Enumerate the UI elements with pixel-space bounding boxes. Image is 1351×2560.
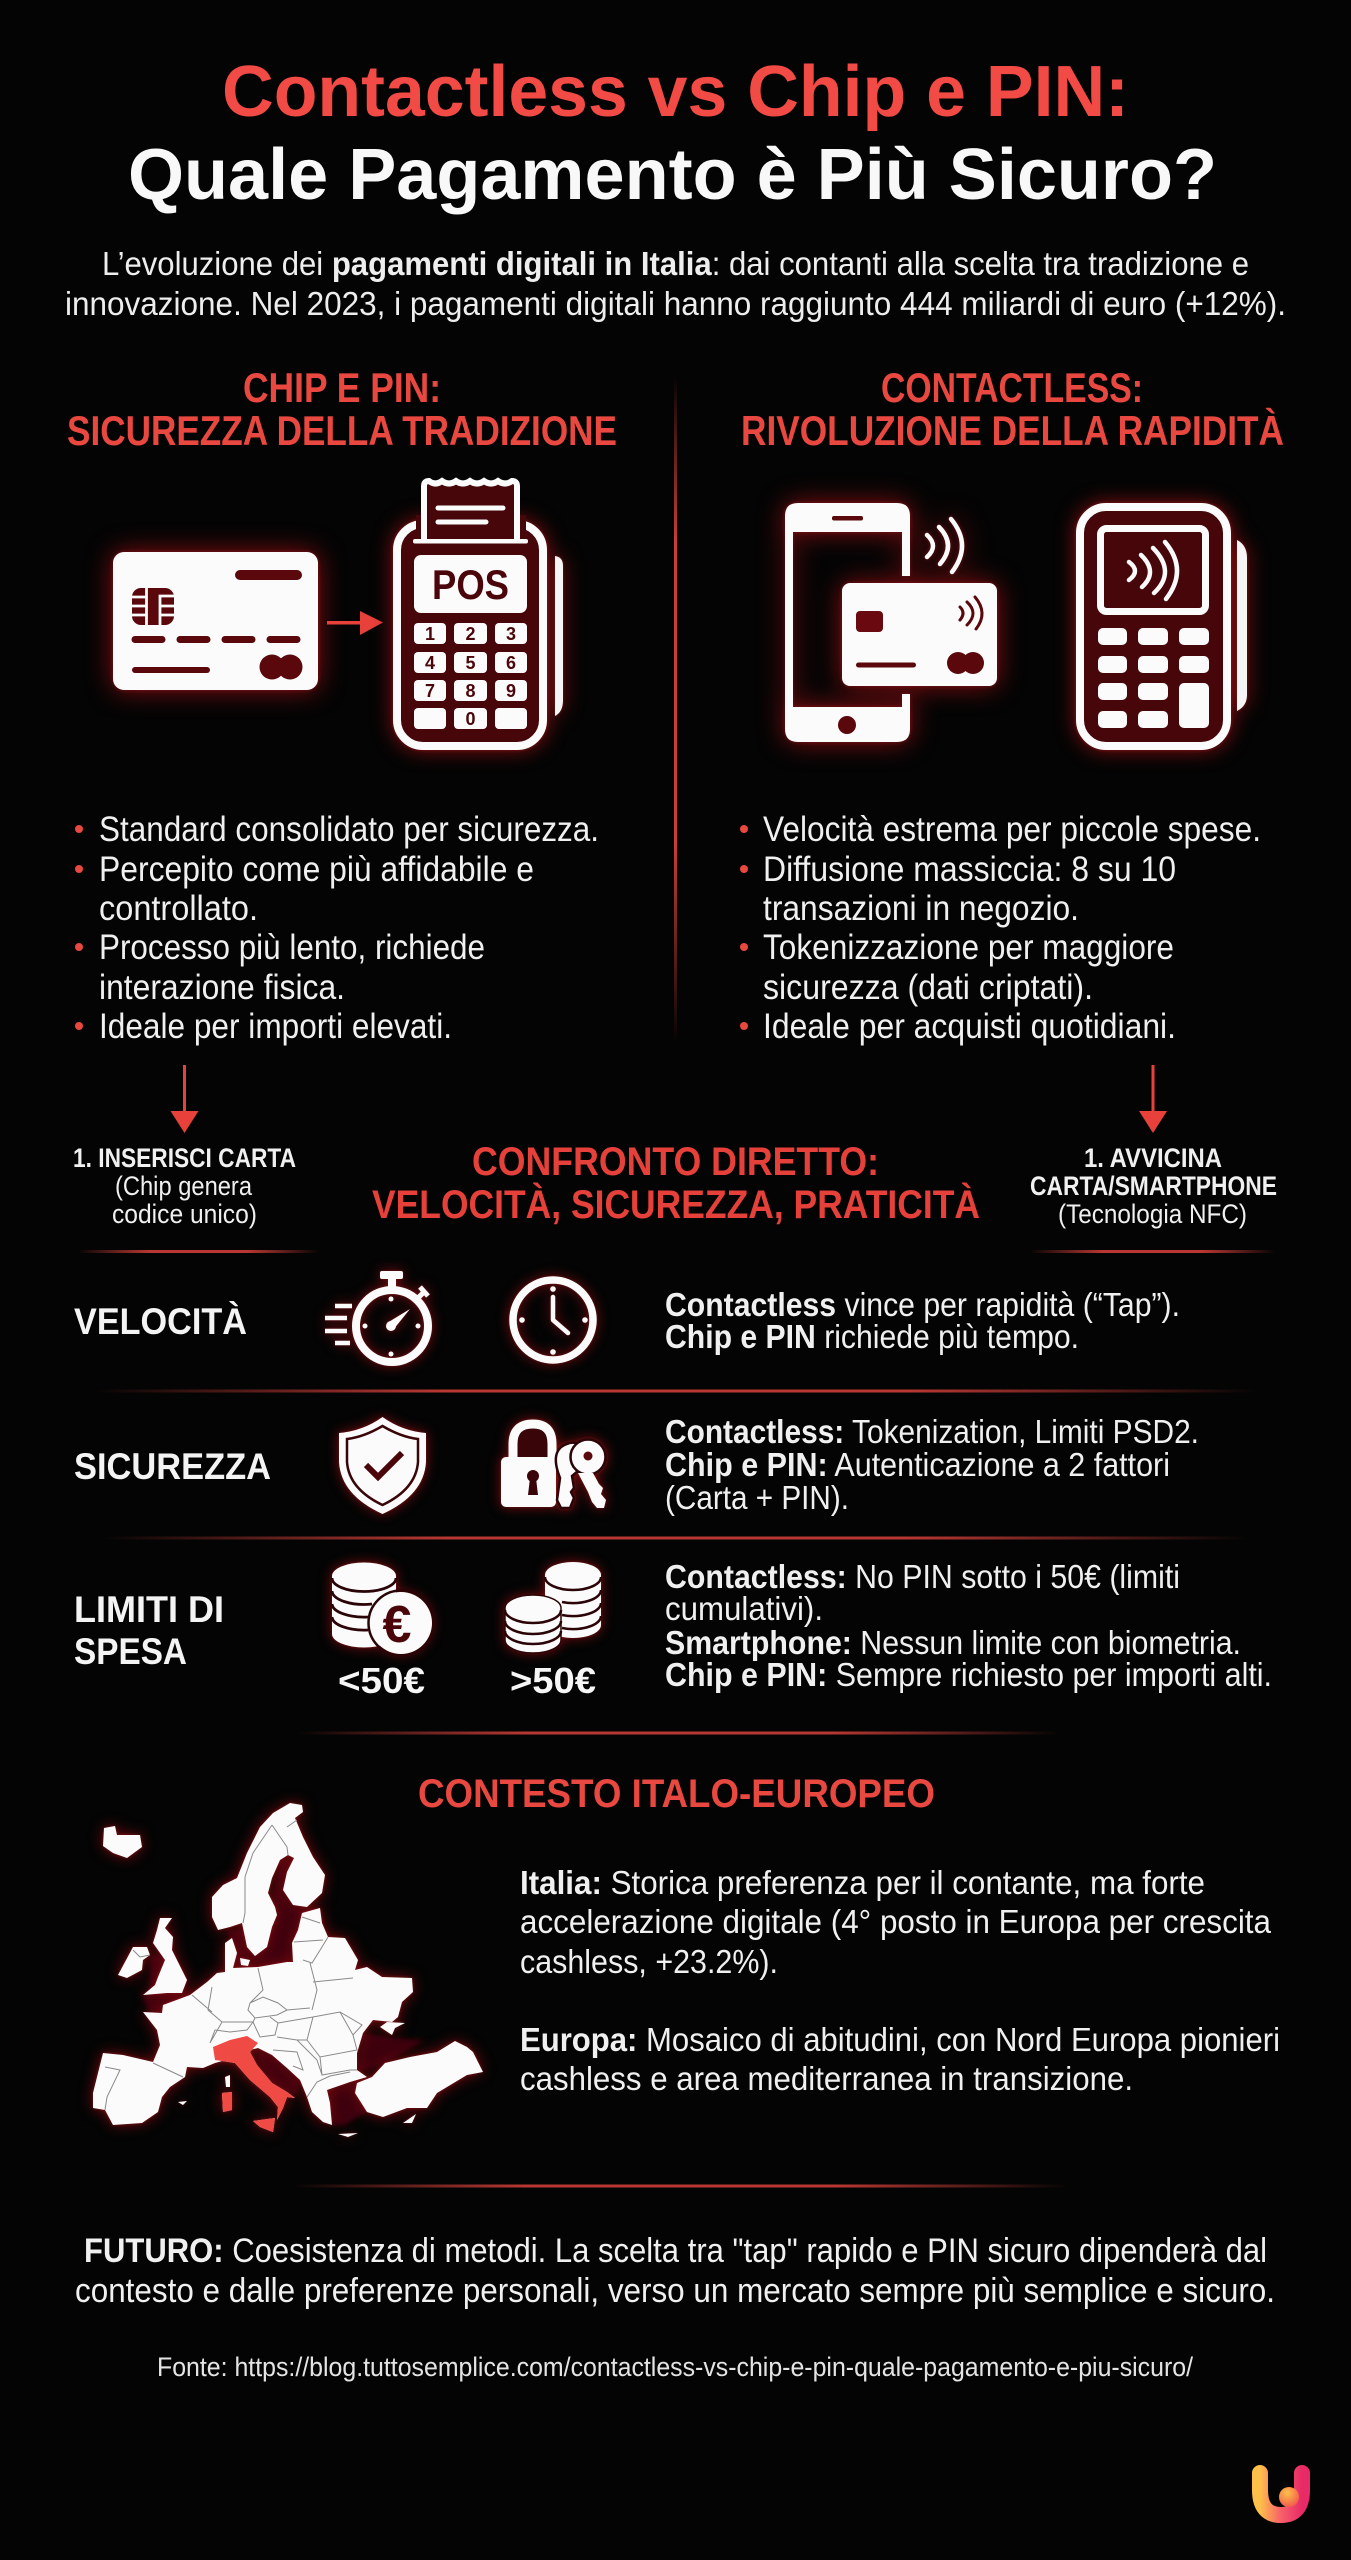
arrow: down left	[170, 1065, 198, 1133]
icon: POS terminal: 9	[506, 681, 516, 701]
text: italia: accelerazione digitale (4° posto in Europa per crescita	[520, 1903, 1272, 1940]
heading: direct comparison: VELOCITÀ, SICUREZZA, PRATICITÀ	[372, 1182, 980, 1227]
text: futuro: contesto e dalle preferenze personali, verso un mercato sempre più semplice e sicuro.	[75, 2272, 1275, 2310]
list: chip e pin features: controllato.	[99, 889, 258, 928]
intro text	[65, 245, 1286, 322]
step: insert card: 1. INSERISCI CARTA	[73, 1143, 296, 1173]
step: tap card or smartphone	[1030, 1143, 1277, 1229]
row label: limiti di spesa: LIMITI DI	[74, 1589, 224, 1630]
icon: POS terminal: 7	[425, 681, 435, 701]
icon: POS terminal: 4	[425, 653, 435, 673]
row text: limiti di spesa	[665, 1558, 1272, 1693]
row text: sicurezza	[665, 1413, 1199, 1516]
text: italia: Italia: Storica preferenza per il contante, ma forte	[520, 1864, 1205, 1901]
list: contactless features: Diffusione massiccia: 8 su 10	[763, 850, 1176, 889]
row text: limiti di spesa: Smartphone: Nessun limite con biometria.	[665, 1624, 1241, 1661]
row label: limiti di spesa	[74, 1589, 224, 1672]
icon: credit card with chip	[113, 552, 318, 690]
list: chip e pin features: Percepito come più affidabile e	[99, 850, 534, 889]
icon: POS terminal: 5	[465, 653, 476, 673]
heading: direct comparison: CONFRONTO DIRETTO:	[472, 1140, 879, 1184]
list: contactless features: Velocità estrema per piccole spese.	[763, 810, 1261, 849]
row label: limiti di spesa: SPESA	[74, 1631, 187, 1672]
icon: smartphone with card	[785, 503, 997, 742]
text: futuro	[75, 2232, 1275, 2310]
step: insert card	[73, 1143, 296, 1229]
icon: coins with euro under 50: €	[383, 1596, 411, 1654]
list: chip e pin features: interazione fisica.	[99, 968, 345, 1007]
icon: contactless terminal	[1080, 507, 1247, 746]
label: under 50 euro: <50€	[338, 1660, 425, 1701]
list: contactless features: transazioni in negozio.	[763, 889, 1079, 928]
row text: limiti di spesa: cumulativi).	[665, 1590, 823, 1627]
list: chip e pin features: Ideale per importi elevati.	[99, 1007, 452, 1046]
heading: chip e pin	[67, 364, 617, 454]
icon: POS terminal: 6	[506, 653, 516, 673]
title: Contactless vs Chip e PIN:	[222, 52, 1129, 132]
list: chip e pin features: Standard consolidato per sicurezza.	[99, 810, 599, 849]
icon: coins with euro under 50	[332, 1562, 434, 1656]
text: europa	[520, 2021, 1280, 2097]
icon: shield with check	[339, 1417, 426, 1514]
text: italia: cashless, +23.2%).	[520, 1943, 778, 1980]
row text: limiti di spesa: Chip e PIN: Sempre richiesto per importi alti.	[665, 1656, 1272, 1693]
title	[128, 52, 1217, 215]
icon: POS terminal: 2	[465, 624, 476, 644]
icon: coin stacks over 50	[505, 1562, 601, 1653]
arrow: down right	[1139, 1065, 1167, 1133]
step: insert card: (Chip genera	[115, 1171, 253, 1201]
arrow: card to POS	[327, 611, 383, 635]
logo	[1260, 2473, 1302, 2515]
list: chip e pin features: Processo più lento, richiede	[99, 928, 485, 967]
row text: sicurezza: Contactless: Tokenization, Limiti PSD2.	[665, 1413, 1199, 1450]
text: italia	[520, 1864, 1272, 1980]
icon: padlock with keys	[501, 1424, 606, 1508]
row text: velocità	[665, 1286, 1180, 1355]
list: contactless features	[740, 810, 1261, 1046]
row text: sicurezza: (Carta + PIN).	[665, 1479, 849, 1516]
icon: POS terminal: 0	[465, 709, 476, 729]
heading: contactless: CONTACTLESS:	[881, 364, 1143, 411]
icon: POS terminal: 3	[506, 624, 516, 644]
row text: velocità: Contactless vince per rapidità (“Tap”).	[665, 1286, 1180, 1323]
list: contactless features: Ideale per acquisti quotidiani.	[763, 1007, 1176, 1046]
list: contactless features: Tokenizzazione per maggiore	[763, 928, 1174, 967]
heading: chip e pin: CHIP E PIN:	[243, 364, 441, 411]
intro text: L’evoluzione dei pagamenti digitali in Italia: dai contanti alla scelta tra tradizione e	[102, 245, 1249, 282]
heading: contesto italo-europeo: CONTESTO ITALO-EUROPEO	[418, 1772, 935, 1816]
row text: sicurezza: Chip e PIN: Autenticazione a 2 fattori	[665, 1446, 1170, 1483]
map: europe with italy highlighted	[93, 1803, 483, 2137]
heading: direct comparison	[372, 1140, 980, 1227]
label: over 50 euro: >50€	[510, 1660, 596, 1701]
step: insert card: codice unico)	[112, 1199, 257, 1229]
icon: clock	[513, 1280, 593, 1360]
row text: limiti di spesa: Contactless: No PIN sotto i 50€ (limiti	[665, 1558, 1180, 1595]
heading: chip e pin: SICUREZZA DELLA TRADIZIONE	[67, 407, 617, 454]
text: europa: cashless e area mediterranea in transizione.	[520, 2060, 1133, 2097]
step: tap card or smartphone: CARTA/SMARTPHONE	[1030, 1171, 1277, 1201]
intro text: innovazione. Nel 2023, i pagamenti digitali hanno raggiunto 444 miliardi di euro (+12%).	[65, 285, 1286, 322]
step: tap card or smartphone: (Tecnologia NFC)	[1058, 1199, 1247, 1229]
icon: POS terminal	[397, 481, 563, 746]
text: europa: Europa: Mosaico di abitudini, con Nord Europa pionieri	[520, 2021, 1280, 2058]
source: Fonte: https://blog.tuttosemplice.com/contactless-vs-chip-e-pin-quale-pagamento-e-piu-sicuro/	[157, 2352, 1193, 2382]
icon: stopwatch	[325, 1271, 428, 1362]
row label: velocità: VELOCITÀ	[74, 1301, 247, 1342]
row label: sicurezza: SICUREZZA	[74, 1446, 271, 1487]
list: contactless features: sicurezza (dati criptati).	[763, 968, 1093, 1007]
text: futuro: FUTURO: Coesistenza di metodi. La scelta tra "tap" rapido e PIN sicuro dipenderà dal	[84, 2232, 1267, 2270]
heading: contactless	[741, 364, 1284, 454]
step: tap card or smartphone: 1. AVVICINA	[1084, 1143, 1222, 1173]
icon: POS terminal: POS	[432, 561, 509, 608]
list: chip e pin features	[75, 810, 599, 1046]
icon: POS terminal: 1	[425, 624, 435, 644]
row text: velocità: Chip e PIN richiede più tempo.	[665, 1318, 1079, 1355]
title: Quale Pagamento è Più Sicuro?	[128, 135, 1217, 215]
icon: POS terminal: 8	[465, 681, 476, 701]
